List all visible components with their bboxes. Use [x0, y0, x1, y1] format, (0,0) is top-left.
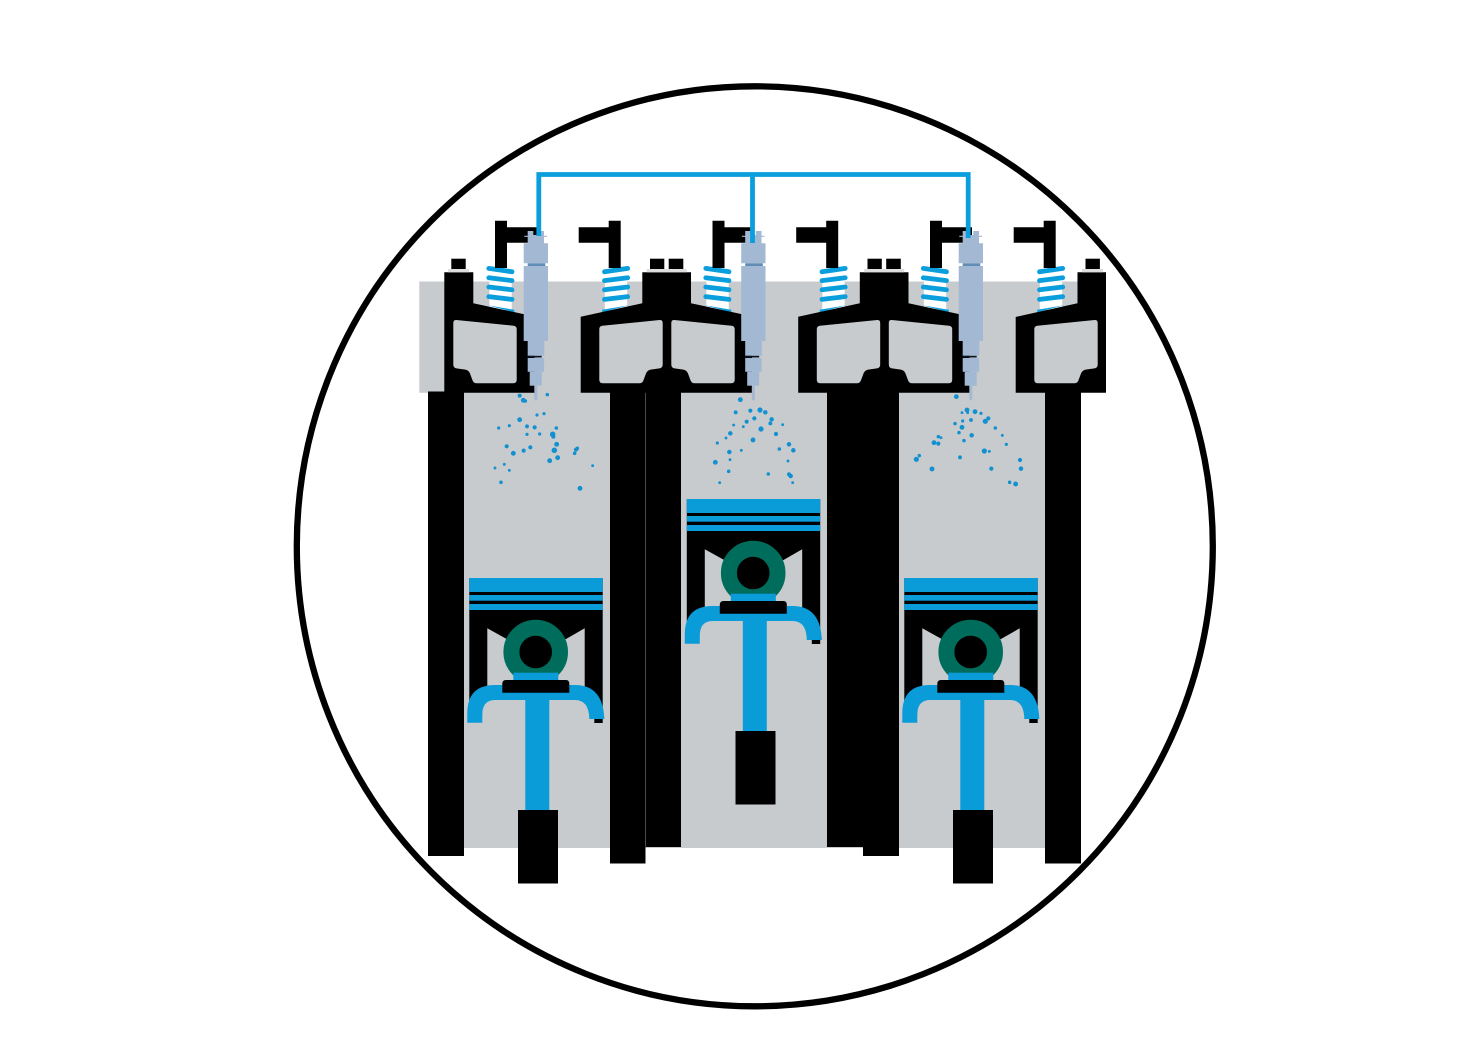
cylinder head 4: [1016, 259, 1106, 393]
cylinder walls: [428, 392, 1081, 864]
fuel injectors: [524, 231, 983, 401]
valve springs: [487, 268, 1064, 312]
cylinder head 2: [581, 259, 752, 393]
fuel spray 2: [713, 398, 795, 484]
fuel rail pipe: [539, 174, 968, 243]
valve rocker arms: [495, 221, 1056, 268]
cylinder head 3: [798, 259, 970, 393]
outer circle: [297, 86, 1213, 1006]
cylinder head 1: [444, 259, 534, 393]
fuel spray 1: [494, 393, 594, 490]
engine block background: [419, 282, 1078, 848]
pistons: [467, 499, 1039, 884]
fuel spray 3: [914, 395, 1023, 486]
